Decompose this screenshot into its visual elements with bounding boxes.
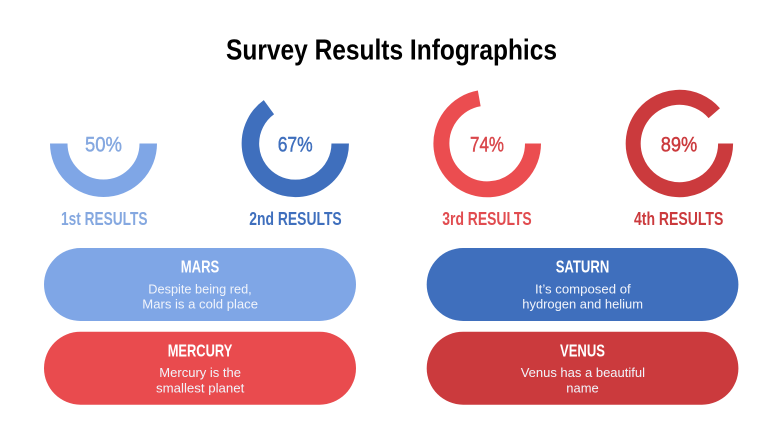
panel: Venus: VENUS	[560, 341, 605, 361]
panel: Mercury	[44, 332, 356, 405]
panel: Mercury: MERCURY	[168, 341, 233, 361]
panel: Mars: MARS	[181, 257, 219, 277]
chart: 1st results donut	[59, 134, 148, 188]
panel: Saturn: hydrogen and helium	[522, 296, 643, 312]
panel: Venus	[427, 332, 738, 405]
label: 1st results: 1st RESULTS	[61, 209, 148, 229]
label: 2nd results: 2nd RESULTS	[249, 209, 342, 229]
panel: Mars: Despite being red,	[148, 281, 252, 296]
panel: Saturn: It’s composed of	[535, 281, 631, 296]
chart: 3rd results donut: 74%	[470, 134, 504, 156]
panel: Venus: name	[566, 380, 599, 395]
chart: 2nd results donut	[250, 107, 340, 188]
title: Survey Results Infographics	[226, 34, 557, 66]
panel: Mercury: Mercury is the	[159, 365, 241, 380]
chart: 4th results donut: 89%	[661, 134, 697, 156]
panel: Mars	[44, 248, 356, 321]
label: 4th results: 4th RESULTS	[634, 209, 723, 229]
panel: Saturn	[427, 248, 738, 321]
label: 3rd results: 3rd RESULTS	[442, 209, 532, 229]
panel: Mars: Mars is a cold place	[142, 296, 258, 312]
chart: 2nd results donut: 67%	[278, 134, 313, 156]
chart: 3rd results donut	[441, 98, 533, 189]
chart: 4th results donut	[633, 97, 726, 190]
panel: Venus: Venus has a beautiful	[521, 365, 645, 380]
panel: Mercury: smallest planet	[156, 380, 245, 395]
chart: 1st results donut: 50%	[85, 134, 122, 156]
panel: Saturn: SATURN	[556, 257, 609, 277]
